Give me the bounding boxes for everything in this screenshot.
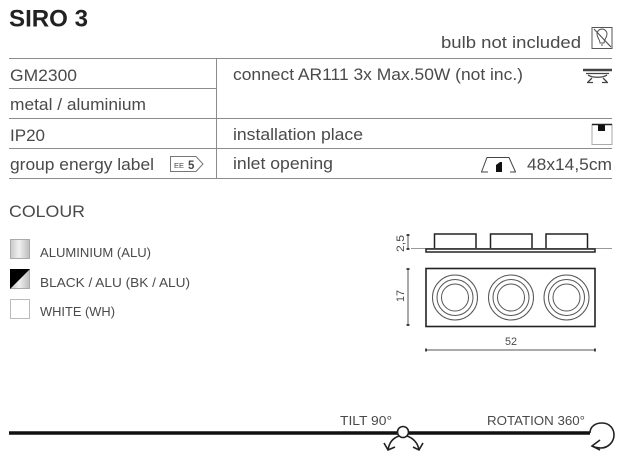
top view [406, 268, 595, 352]
rotation label: ROTATION 360° [487, 414, 585, 428]
icon: energy label: EE [174, 161, 184, 170]
icon: tilt arrows [384, 426, 423, 450]
dimension: height: 2,5 [395, 235, 407, 252]
cable line [9, 431, 590, 435]
technical drawing [395, 234, 612, 352]
side view [406, 234, 612, 252]
icon: rotation arrow [590, 423, 614, 450]
dimension: width: 52 [505, 336, 517, 348]
tilt label: TILT 90° [340, 414, 392, 428]
spec: code: GM2300 [10, 66, 77, 85]
colour swatch: white: WHITE (WH) [40, 305, 115, 319]
colour swatch: aluminium [10, 240, 151, 260]
colour swatch: black / aluminium [10, 269, 190, 290]
icon: bulb crossed out [592, 28, 612, 48]
colour heading: COLOUR [9, 203, 85, 221]
dimension: depth: 17 [395, 290, 407, 302]
colour swatch: black / aluminium: BLACK / ALU (BK / ALU) [40, 276, 190, 290]
icon: installation place [592, 124, 612, 144]
specification table [9, 58, 612, 178]
icon: inlet opening [481, 158, 516, 172]
title: SIRO 3 [9, 6, 88, 33]
note: bulb not included: bulb not included [441, 33, 581, 52]
spec: protection: IP20 [10, 126, 45, 145]
spec: inlet size: 48x14,5cm [527, 155, 612, 174]
spec: material: metal / aluminium [10, 95, 146, 114]
colour swatch: white [10, 300, 115, 319]
icon: AR111 lamp [583, 70, 612, 82]
spec: inlet opening: inlet opening [233, 154, 333, 173]
colour swatch: aluminium: ALUMINIUM (ALU) [40, 246, 151, 260]
icon: energy label [170, 156, 203, 172]
spec: group energy label: group energy label [10, 155, 154, 174]
spec: connection: connect AR111 3x Max.50W (not inc.) [233, 65, 523, 84]
icon: energy label: 5 [188, 160, 195, 172]
spec: installation place: installation place [233, 125, 363, 144]
